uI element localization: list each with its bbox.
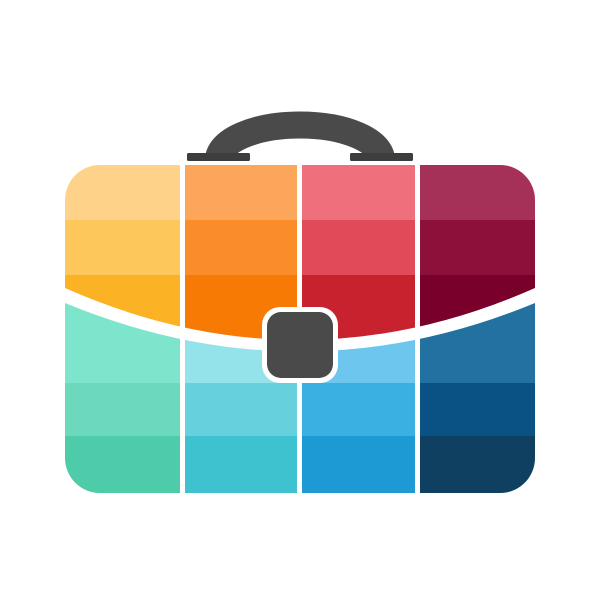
top half of case [65, 165, 535, 355]
bottom half of case [65, 300, 535, 493]
briefcase icon [65, 112, 535, 493]
clasp [262, 307, 338, 383]
handle [187, 125, 413, 161]
